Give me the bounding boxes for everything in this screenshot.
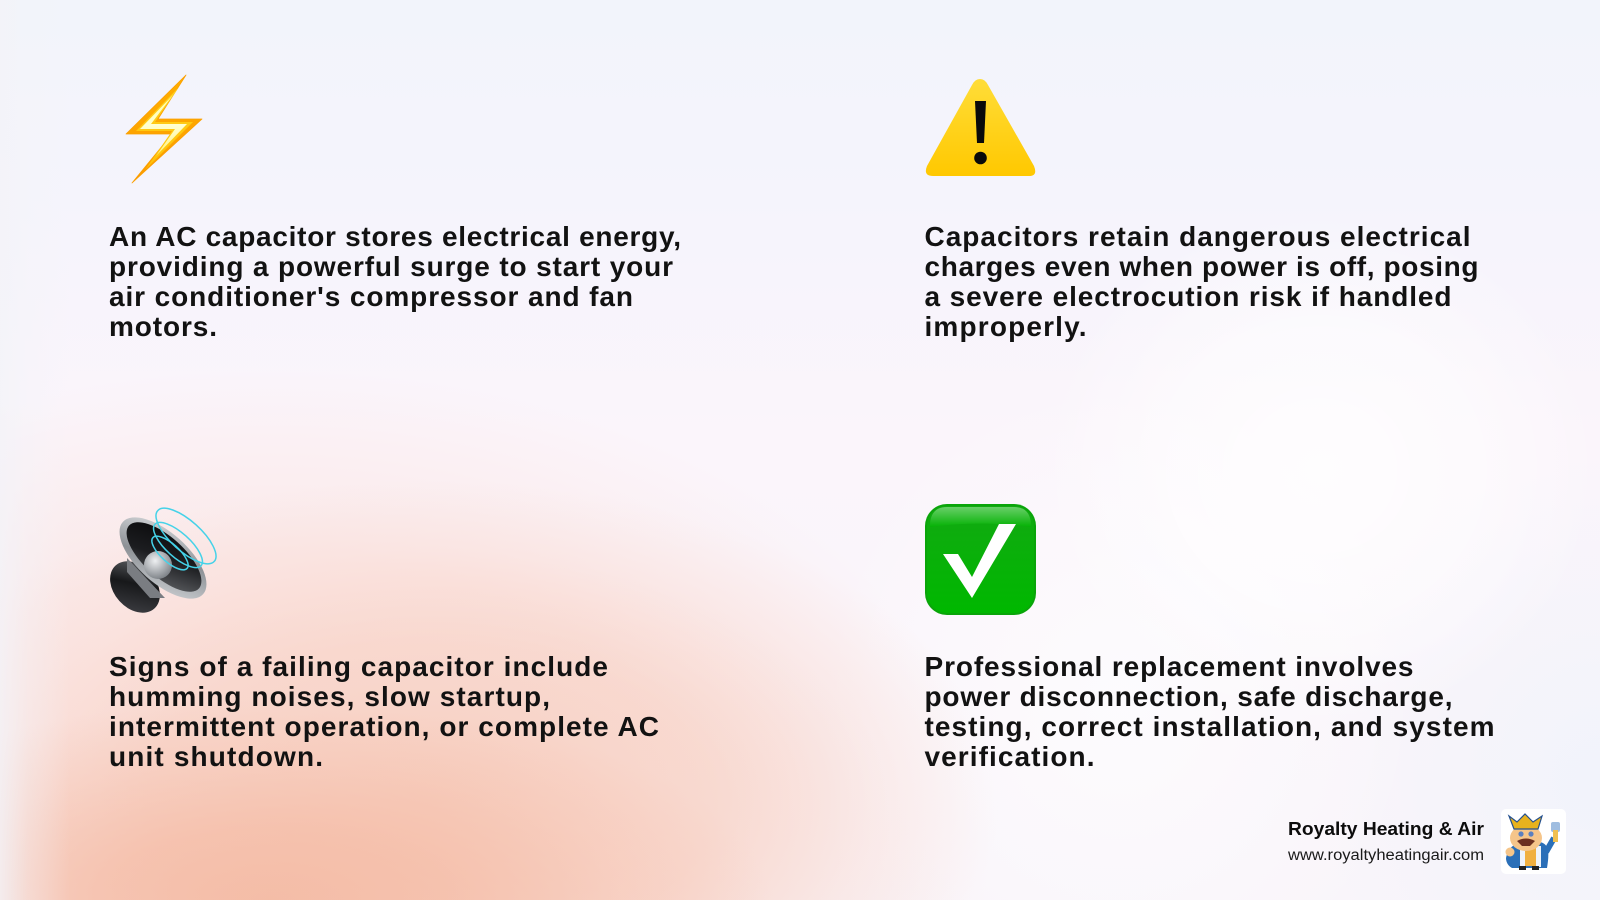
icon: green check mark (925, 504, 1036, 615)
text: signs of failure (109, 651, 659, 772)
text: danger warning: Capacitors retain dangerous electrical (924, 221, 1470, 252)
text: danger warning: a severe electrocution risk if handled (924, 281, 1452, 312)
text: what a capacitor does: An AC capacitor stores electrical energy, (109, 221, 681, 252)
text: professional replacement (924, 651, 1494, 772)
text: danger warning: charges even when power is off, posing (924, 251, 1478, 282)
brand name: Royalty Heating & Air (1288, 819, 1484, 839)
text: danger warning (924, 221, 1478, 342)
text: what a capacitor does: providing a powerful surge to start your (109, 251, 673, 282)
text: professional replacement: power disconnection, safe discharge, (924, 681, 1452, 712)
icon: speaker (100, 499, 224, 623)
text: professional replacement: Professional replacement involves (924, 651, 1414, 682)
text: what a capacitor does: air conditioner's compressor and fan (109, 281, 633, 312)
text: signs of failure: unit shutdown. (109, 741, 323, 772)
text: signs of failure: humming noises, slow startup, (109, 681, 550, 712)
brand block (1287, 809, 1566, 874)
text: professional replacement: verification. (924, 741, 1094, 772)
text: professional replacement: testing, correct installation, and system (924, 711, 1494, 742)
text: signs of failure: Signs of a failing capacitor include (109, 651, 608, 682)
logo: king mascot (1501, 809, 1566, 874)
text: signs of failure: intermittent operation, or complete AC (109, 711, 659, 742)
text: danger warning: improperly. (924, 311, 1086, 342)
brand website: www.royaltyheatingair.com (1287, 847, 1484, 864)
icon: warning triangle (926, 79, 1035, 176)
text: what a capacitor does: motors. (109, 311, 217, 342)
text: what a capacitor does (109, 221, 681, 342)
icon: lightning bolt (126, 75, 202, 183)
